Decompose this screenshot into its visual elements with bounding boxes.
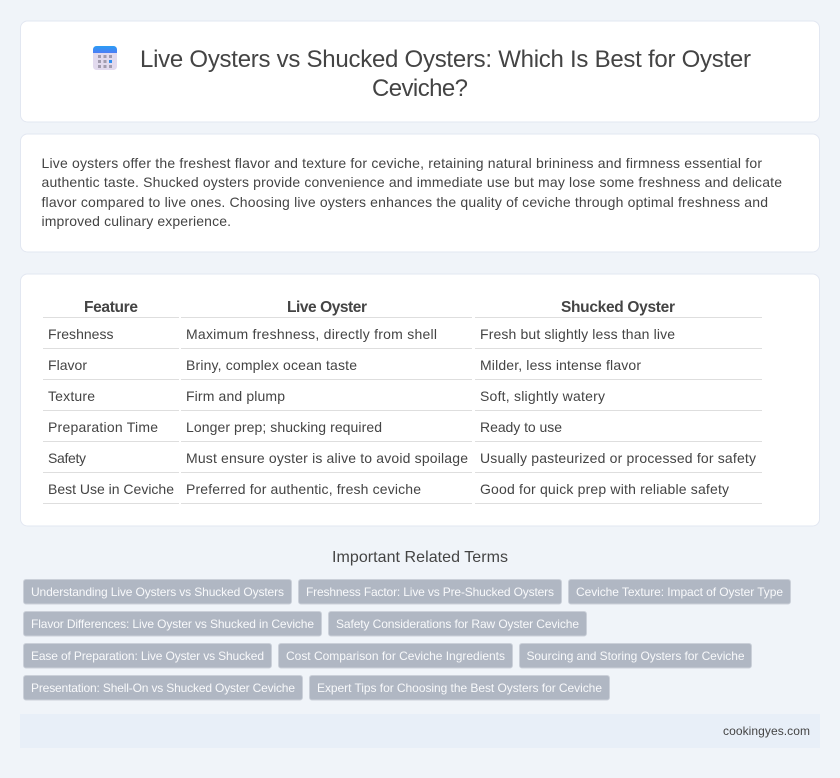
row: flavor: Flavor [48,357,87,373]
row: freshness: Freshness [48,326,114,342]
text block: summary: flavor compared to live ones. Choosing live oysters enhances the quality of ceviche through optimal freshness and [42,194,768,210]
table header [84,299,675,316]
row: texture [48,388,605,404]
row: flavor [48,357,641,373]
tag: expert tips [310,676,610,700]
tag: expert tips: Expert Tips for Choosing the Best Oysters for Ceviche [317,681,602,695]
row: preparation time: Preparation Time [48,419,158,435]
heading: related terms: Important Related Terms [332,549,508,566]
panel: summary [20,134,820,252]
row: safety: Must ensure oyster is alive to avoid spoilage [186,450,468,466]
row: freshness: Fresh but slightly less than live [480,326,675,342]
row: best use in ceviche: Best Use in Ceviche [48,481,174,497]
footer [20,714,820,748]
tag: sourcing and storing [520,644,752,668]
row: safety: Safety [48,450,86,466]
row: safety: Usually pasteurized or processed for safety [480,450,756,466]
tag: sourcing and storing: Sourcing and Storing Oysters for Ceviche [526,649,745,663]
tag: ease of preparation [24,644,272,668]
tag: cost comparison [278,644,512,668]
tag: understanding: Understanding Live Oysters vs Shucked Oysters [31,585,284,599]
tag: ceviche texture [568,580,790,604]
tag: presentation [24,676,302,700]
row: best use in ceviche: Preferred for authentic, fresh ceviche [186,481,421,497]
tag: freshness factor: Freshness Factor: Live vs Pre-Shucked Oysters [306,585,554,599]
tag: presentation: Presentation: Shell-On vs Shucked Oyster Ceviche [31,681,295,695]
tag: cost comparison: Cost Comparison for Ceviche Ingredients [286,649,505,663]
tag: safety considerations [328,612,586,636]
text block: summary: authentic taste. Shucked oysters provide convenience and immediate use but may lose some freshness and delicate [42,174,782,190]
row: preparation time: Longer prep; shucking required [186,419,382,435]
row: freshness [48,326,675,342]
row: texture: Soft, slightly watery [480,388,605,404]
tag: understanding [24,580,292,604]
panel: comparison table [20,274,820,526]
panel: header [20,21,820,122]
tag: flavor differences: Flavor Differences: Live Oyster vs Shucked in Ceviche [31,617,314,631]
tag: ease of preparation: Ease of Preparation: Live Oyster vs Shucked [31,649,264,663]
row: best use in ceviche [48,481,729,497]
title [140,46,751,102]
row: flavor: Milder, less intense flavor [480,357,641,373]
row: texture: Texture [48,388,95,404]
related term tags [24,580,790,700]
title: Live Oysters vs Shucked Oysters: Which Is Best for Oyster [140,46,751,73]
table header: Live Oyster [287,299,367,316]
row: texture: Firm and plump [186,388,285,404]
title: Ceviche? [372,75,468,102]
row: freshness: Maximum freshness, directly from shell [186,326,437,342]
tag: ceviche texture: Ceviche Texture: Impact of Oyster Type [576,585,783,599]
row: preparation time [48,419,562,435]
row: preparation time: Ready to use [480,419,562,435]
table header: Shucked Oyster [561,299,675,316]
table header: Feature [84,299,138,316]
footer source: cookingyes.com [723,724,810,738]
tag: safety considerations: Safety Considerations for Raw Oyster Ceviche [336,617,579,631]
row: best use in ceviche: Good for quick prep with reliable safety [480,481,729,497]
row: safety [48,450,756,466]
text block: summary [42,155,782,229]
text block: summary: Live oysters offer the freshest flavor and texture for ceviche, retaining natural brininess and firmness essential for [42,155,762,171]
row: flavor: Briny, complex ocean taste [186,357,357,373]
icon: calendar [93,46,117,70]
tag: freshness factor [298,580,562,604]
tag: flavor differences [24,612,322,636]
text block: summary: improved culinary experience. [42,213,231,229]
